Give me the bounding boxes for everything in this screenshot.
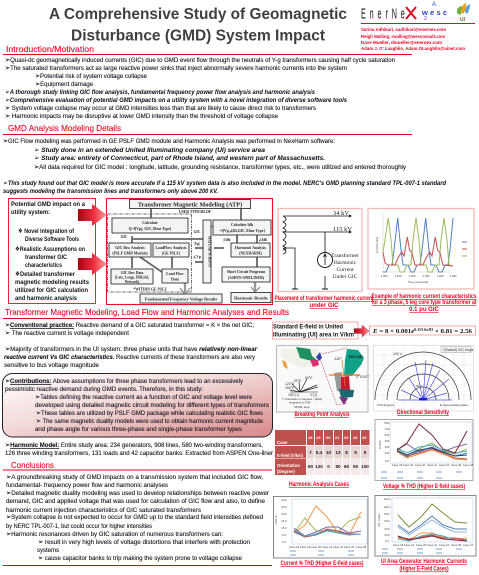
chart: generator harmonic currents: Case 27 [463,543,474,547]
text block: harmonic model: 126 three winding transformers, 131 loads and 42 capacitor banks: Extracted from ASPEN One-liner [5,450,274,457]
icon: orientation rays: 150°E [285,386,295,390]
chart: voltage THD: Case 18 [392,463,403,467]
text block: introduction: ➢The saturated transformers act as large reactive power sinks that inject abnormally severe harmonic currents into the system [5,65,347,72]
callout: standard E-field: Standard E-field in United [273,324,343,330]
chart: current THD: 30.0 [281,512,287,516]
arrow: upper red [78,204,107,226]
caption: harmonic current example [372,294,477,313]
caption: harmonic analysis cases: Harmonic Analysis Cases [289,482,350,488]
box: load flow analysis [153,243,189,257]
chart: voltage THD: 800 [385,421,390,425]
logo: WESC: wesc [421,8,447,17]
logo: WESC [421,2,447,22]
text block: conventional practice: ➢Conventional practice: Reactive demand of a GIC saturated transformer = K × the net GIC; [5,322,254,329]
table: harmonic analysis cases: 90 [335,464,341,469]
logo: WESC: A [432,2,436,8]
chart: voltage THD: Case 19 [403,463,414,467]
caption: breaking point: Breaking Point Analysis [294,412,350,418]
authors: Dave Mueller, dmueller@enernex.com [361,40,442,45]
box: calculating Q [112,218,188,233]
box: short circuit: Short Circuit Programs [227,270,266,274]
title: A Comprehensive Study of Geomagnetic [49,6,347,23]
text block: conventional practice: ➢Majority of transformers in the UI system: three phase units that have relatively non-linear [5,346,257,353]
map: region detail [320,348,369,405]
text block: modeling details: suggests modeling the transmission lines and transformers only above 200 kV. [3,188,218,195]
text block: conventional practice: sensitive to bus voltage magnitude [4,362,99,369]
table: harmonic analysis cases: 26 [353,435,358,440]
chart: harmonic current waveform: 1.030 [422,274,430,278]
table: harmonic analysis cases: 60 [344,464,349,469]
formula: E-field: E = 8 × 0.001 e [373,328,414,335]
box: GIC flow analysis: GIC flow Analysis [115,246,145,250]
chart: harmonic current waveform: 1.050 [450,274,457,278]
box: harmonic analysis [231,243,270,257]
box: harmonic analysis: Harmonic Analysis [235,246,266,250]
chart: voltage THD: 200 [385,451,390,455]
chart: voltage THD: 600 [385,433,390,437]
caption: generator harmonic currents: (Higher E-Field Cases) [400,566,448,572]
chart: harmonic current waveform: Current (kA) [375,237,379,253]
chart: voltage THD: THD% [378,440,382,449]
heading: introduction: Introduction/Motivation [6,44,94,54]
chart: voltage THD: 400 [385,439,390,443]
formula: E-field: × 0.81 = 2.56 [433,328,472,335]
chart: directional sensitivity: *(Scaled) GIC Amps [443,348,474,352]
callout: standard E-field [272,322,358,339]
table: harmonic analysis cases: 22 [344,435,349,440]
chart: generator harmonic currents: 0.0 [385,539,389,543]
chart: harmonic current waveform: 1.000 [380,274,388,278]
logos [361,2,470,23]
panel: modeling flow diagram: *WITHIN GE PSLF [133,288,167,292]
panel: transformer circuit [278,208,362,292]
panel: potential GMD impact: magnetic modeling results [15,279,89,286]
table: harmonic analysis cases: 28 [362,435,367,440]
chart: current THD: 15.0 [281,526,287,530]
text block: conclusions: by NERC TPL-007-1, but could occur for higher intensities [6,523,153,530]
panel: contributions: developed using detailed magnetic circuit modeling for different types of transformers [35,402,270,409]
map: region detail: JJ0° [333,356,342,361]
chart: voltage THD: Case 20 [415,463,426,467]
table: harmonic analysis cases: 9 [364,450,367,455]
chart: voltage THD: Case 22 [439,463,450,467]
panel: potential GMD impact: characteristics [25,262,62,269]
caption: placement of harmonic current: under GIC [309,303,339,309]
chart: current THD: 5.0 [282,533,286,537]
chart: current THD: Case 20 [311,545,322,549]
box: harmonic analysis: (NEXHARM) [239,252,263,256]
table: harmonic analysis cases: 19 [316,435,321,440]
table: harmonic analysis cases: 0 [327,464,330,469]
icon: orientation rays: *) Orientation in degrees ; (East) [282,397,322,401]
formula: E-field: 0.115·6x/82 [414,328,433,332]
box: fundamental results: Fundamental Frequency Voltage Results [145,296,218,302]
panel: potential GMD impact: ❖Detailed transformer [15,271,75,278]
chart: current THD: 0.0 [282,540,286,544]
box: calculating Idh: =f[Vp,∠Bi,GIC,Xfmr Type] [219,228,265,233]
chart: directional sensitivity: E-Appropriating East [440,403,468,407]
box: calculating Q: Calculate [142,221,158,225]
table: harmonic analysis cases: 7 [309,450,312,455]
chart: harmonic current waveform: Time (seconds) [408,280,428,284]
chart: current THD: Case 26 [344,545,355,549]
arrow: E-field to formula [354,325,369,337]
caption: harmonic current example: 0.1 pu GIC [409,307,440,313]
box: MATLAB scripts [203,220,212,283]
text block: conventional practice: ➢ The reactive current is voltage independent [5,330,129,337]
title: Disturbance (GMD) System Impact [71,28,326,44]
box: load flow analysis: (GE PSLF) [162,252,181,256]
panel: potential GMD impact [8,198,96,304]
text block: conclusions: ➢A groundbreaking study of GMD impacts on a transmission system that included GIC flow, [6,474,263,481]
text block: conclusions: ➢Detailed magnetic duality modeling was used to develop relationships between reactive power [6,490,270,497]
panel: potential GMD impact: transformer GIC [25,254,67,261]
panel: modeling flow diagram [106,198,272,304]
logo: UI: UI [460,17,466,23]
text block: introduction: ➢ System voltage collapse may occur at GMD intensities less than that are likely to cause direct risk to transformers [5,105,317,112]
authors: Sarina Adhikari, sadhikari@enernex.com [361,27,446,32]
text block: conclusions: systems [37,547,60,554]
panel: transformer circuit: Transformer [331,252,359,259]
panel: contributions: ➢Contributions: Above assumptions for three phase transformers lead to an excessively [5,378,244,385]
text block: conclusions: ➢Harmonic resonances driven by GIC saturation of numerous transformers can: [6,531,223,538]
panel: modeling flow diagram: |Idh| [224,238,231,242]
chart: current THD: THD % [274,515,278,525]
chart: generator harmonic currents [375,496,476,556]
table: harmonic analysis cases: 21 [335,435,340,440]
panel: contributions: pessimistic reactive demand during GMD events. Therefore, in this study: [5,386,203,393]
chart: voltage THD: 0.0 [385,459,389,463]
box: calculating Idh [213,220,271,235]
icon: orientation rays: 90°E [294,379,302,383]
text block: introduction: ➢Equipment damage [35,81,93,88]
text block: introduction: ➢A thorough study linking GIC flow analysis, fundamental frequency power flow analysis and harmonic analysis [5,89,315,96]
box: GIC flow data [111,269,153,284]
icon: orientation rays [282,376,322,409]
text block: modeling details: ➢ Study done in an extended United Illuminating company (UI) service area [34,147,265,154]
panel: potential GMD impact: utility system: [11,209,50,216]
chart: generator harmonic currents: Case 19 [404,543,415,547]
formula: E-field [370,326,476,335]
chart: generator harmonic currents: Case 20 [416,543,427,547]
chart: voltage THD: Case 21 [427,463,438,467]
panel: contributions: ➢These tables are utilized by PSLF GMD package while calculating realistic GIC flows [36,410,264,417]
table: harmonic analysis cases: E-field (V/km) [277,453,303,458]
box: GIC flow data: Network) [125,280,140,284]
box: calculating Q: Q=f[Vpj, GIC,Xfmr Type] [129,227,171,231]
panel: potential GMD impact: Potential GMD impact on a [11,201,85,208]
chart: directional sensitivity: 50 V [416,384,422,388]
text block: modeling details [3,138,447,195]
chart: harmonic current waveform: 1.020 [408,274,416,278]
icon: orientation rays: 0°(1) [310,393,317,397]
text block: harmonic model: ➢Harmonic Model: Entire study area: 234 generators, 908 lines, 580 two-winding transformers, [5,442,263,449]
chart: harmonic current waveform [368,208,474,289]
chart: generator harmonic currents: 40.0 [384,527,390,531]
map: region detail: 0° EAST [356,375,369,379]
chart: directional sensitivity: 0.00 degrees [377,403,395,407]
caption: current THD: Current % THD (Higher E-field cases) [280,561,364,567]
panel: transformer circuit: 34 kV [333,210,349,217]
chart: harmonic current waveform: 1.040 [436,274,444,278]
chart: current THD [274,496,368,558]
panel: potential GMD impact: utilized for GIC calculation [15,287,88,294]
chart: generator harmonic currents: Case 22 [439,543,450,547]
panel: modeling flow diagram: USER TYPE/BLDF [179,210,212,214]
text block: introduction: ➢Potential risk of system voltage collapse [35,73,147,80]
text block: introduction: ➢ Harmonic impacts may be disruptive at lower GMD intensity than the threshold of voltage collapse [5,113,278,120]
chart: harmonic current waveform: 1.010 [394,274,402,278]
panel: transformer circuit: Under GIC [332,274,358,280]
box: harmonic results: Harmonic Results [234,296,268,300]
text block: conclusions: harmonic current injection characteristics of GIC saturated transformers [6,507,202,514]
table: harmonic analysis cases: 9 [354,450,357,455]
chart: voltage THD: Case 28 [463,463,474,467]
box: load flow data [162,269,188,283]
arrows: data flow [132,208,260,295]
chart: current THD: Case 22 [333,545,344,549]
chart: current THD: Case 21 [322,545,333,549]
chart: generator harmonic currents: 120.0 [384,497,391,501]
text block: conventional practice: reactive current Vs GIC characteristics. Reactive currents of these transformers are also very [4,354,256,361]
table: harmonic analysis cases: 90 [353,464,358,469]
box: calculating Idh: Calculate Idh [231,223,254,227]
table: harmonic analysis cases: Orientation [277,463,300,468]
chart: voltage THD: Case 26 [451,463,462,467]
chart: current THD: 25.0 [281,519,287,523]
chart: directional sensitivity [374,346,474,411]
text block: introduction [5,57,395,120]
text block: modeling details: ➢GIC Flow modeling was performed in GE PSLF GMD module and Harmonic Analysis was performed in NexHarm software: [3,138,335,145]
text block: conclusions: ➢ result in very high levels of voltage distortions that interfere with protection [38,539,250,546]
icon: orientation rays: neighbors & PJM [289,400,311,404]
text block: introduction: ➢Comprehensive evaluation of potential GMD impacts on a utility system with a novel integration of diverse software tools [5,97,347,104]
box: fundamental results [140,294,222,303]
table: harmonic analysis cases [275,430,370,475]
panel: transformer circuit: Harmonic [334,260,357,266]
chart: generator harmonic currents: 60.0 [384,519,390,523]
panel: potential GMD impact: ❖ Novel Integration of [18,228,75,235]
icon: orientation rays: 60°E [305,376,313,380]
box: load flow data: Load Flow [166,272,184,276]
box: harmonic results [231,292,271,302]
text block: conventional practice [4,322,257,369]
box: short circuit: (ASPEN ONELINER) [228,276,265,280]
table: harmonic analysis cases: (Degree) [277,469,295,474]
box: load flow data: Data [171,278,179,282]
text block: conclusions: demand, GIC and applied voltage that was used for calculation of GIC flow and also, to define [6,498,265,505]
panel: contributions: ➢ The same magnetic duality models were used to obtain harmonic current magnitude [36,418,263,425]
box: GIC flow analysis: (PSLF GMD Module) [112,252,148,256]
chart: generator harmonic currents: Case 26 [451,543,462,547]
text block: modeling details: ➢All data required for GIC model : longitude, latitude, grounding resistance, transformer types, etc., were utilized and entered thoroughly [34,164,407,171]
box: GIC flow data: GIC flow Data [121,271,143,275]
authors: Reigh Walling, rwalling@wesconsult.com [361,34,445,39]
map: breaking point analysis [276,346,369,412]
box: ATP [130,200,250,208]
panel: modeling flow diagram: GIC [194,230,201,234]
text block: modeling details: ➢ Study area: entirety of Connecticut, part of Rhode Island, and western part of Massachusetts. [34,155,325,162]
panel: contributions: and phase angle for various three-phase and single-phase transformer types [35,426,243,433]
chart: generator harmonic currents: 20.0 [384,533,390,537]
table: harmonic analysis cases: 5.4 [316,450,323,455]
panel: transformer circuit: 115 kV [333,226,352,233]
chart: generator harmonic currents: 80.0 [384,512,390,516]
text block: conclusions: ➢System collapse is not expected to occur for GMD up to the standard field intensities defined [6,514,263,521]
text block: harmonic model [5,442,274,457]
table: harmonic analysis cases: 13 [335,450,341,455]
chart: current THD: 35.0 [281,505,287,509]
box: ATP: Transformer Magnetic Modeling (ATP) [138,202,242,208]
table: harmonic analysis cases: 120 [315,464,323,469]
logo: WESC: 2 [424,16,427,22]
box: short circuit [222,267,270,282]
chart: generator harmonic currents: Rh, Amps [377,513,381,527]
chart: voltage THD: 300 [385,445,390,449]
authors [361,27,465,51]
title [49,6,347,44]
icon: orientation rays: 120°E [285,382,295,386]
table: harmonic analysis cases: 20 [326,435,331,440]
heading: GMD analysis: GMD Analysis Modeling Details [8,123,121,133]
panel: modeling flow diagram: ∠Idh [259,238,267,242]
table: harmonic analysis cases: 150 [361,464,369,469]
table: harmonic analysis cases: 18 [308,435,313,440]
caption: placement of harmonic current: Placement of transformer harmonic current [274,296,374,302]
chart: current THD: Case 19 [300,545,311,549]
box: MATLAB scripts: MATLAB SCRIPTS [208,236,212,267]
panel: modeling flow diagram: GIC [121,235,128,239]
chart: generator harmonic currents: Case 21 [427,543,438,547]
map: region detail: ISO NE [349,354,363,359]
box: GIC flow data: (Lats, Longs, DBGrid, [115,276,149,280]
arrow: lower red [78,253,107,275]
chart: voltage THD [375,420,474,480]
table: harmonic analysis cases: 10 [326,450,331,455]
authors: Adam J. O' Laughlin, Adam.OLaughlin@uinet.com [361,46,465,51]
chart: current THD: 40.0 [281,498,287,502]
panel: modeling flow diagram: |Vp| [194,242,200,246]
panel: potential GMD impact: Diverse Software Tools [25,236,79,243]
map: US regions [280,347,322,369]
heading: conclusions: Conclusions [11,460,54,470]
text block: conclusions [6,474,270,562]
logo: EnerNex: EnerNe [361,7,405,22]
chart: generator harmonic currents: 100.0 [384,505,391,509]
panel: transformer circuit: Current [336,267,354,273]
panel: potential GMD impact: ❖Realistic Assumptions on [15,246,85,253]
icon: orientation rays: SPGM, area [294,405,310,409]
box: load flow analysis: LoadFlow Analysis [156,246,187,250]
chart: generator harmonic currents: Case 18 [393,543,404,547]
chart: voltage THD: 700 [385,427,390,431]
heading: transformer modeling: Transformer Magnetic Modeling, Load Flow and Harmonic Analyses and Results [5,307,289,317]
caption: placement of harmonic current [274,296,374,309]
caption: generator harmonic currents [381,559,468,572]
panel: potential GMD impact: and harmonic analysis [15,295,77,302]
chart: current THD: Case 28 [356,545,367,549]
panel: contributions [2,374,272,437]
chart: current THD: Case 18 [289,545,300,549]
panel: contributions: ➢Tables defining the reactive current as a function of GIC and voltage level were [35,394,252,401]
table: harmonic analysis cases: 8 [345,450,348,455]
text block: conclusions: fundamental- frequency power flow and harmonic analyses [6,482,169,489]
text block: introduction: ➢Quasi-dc geomagnetically induced currents (GIC) due to GMD event flow through the neutrals of Y-g transformers causing half cycle saturation [5,57,395,64]
caption: directional sensitivity: Directional Sensitivity [397,410,450,416]
box: GIC flow analysis [109,243,151,257]
chart: directional sensitivity: 100 V [393,352,403,356]
icon: orientation rays: 180°(1) [288,393,299,397]
text block: conclusions: ➢ cause capacitor banks to trip making the system prone to voltage collapse [38,555,242,562]
callout: standard E-field: Illuminating (UI) area in V/km [273,332,354,338]
table: harmonic analysis cases: 60 [308,464,313,469]
table: harmonic analysis cases: Case [277,440,288,445]
panel: modeling flow diagram: ∠Vp [193,255,201,259]
